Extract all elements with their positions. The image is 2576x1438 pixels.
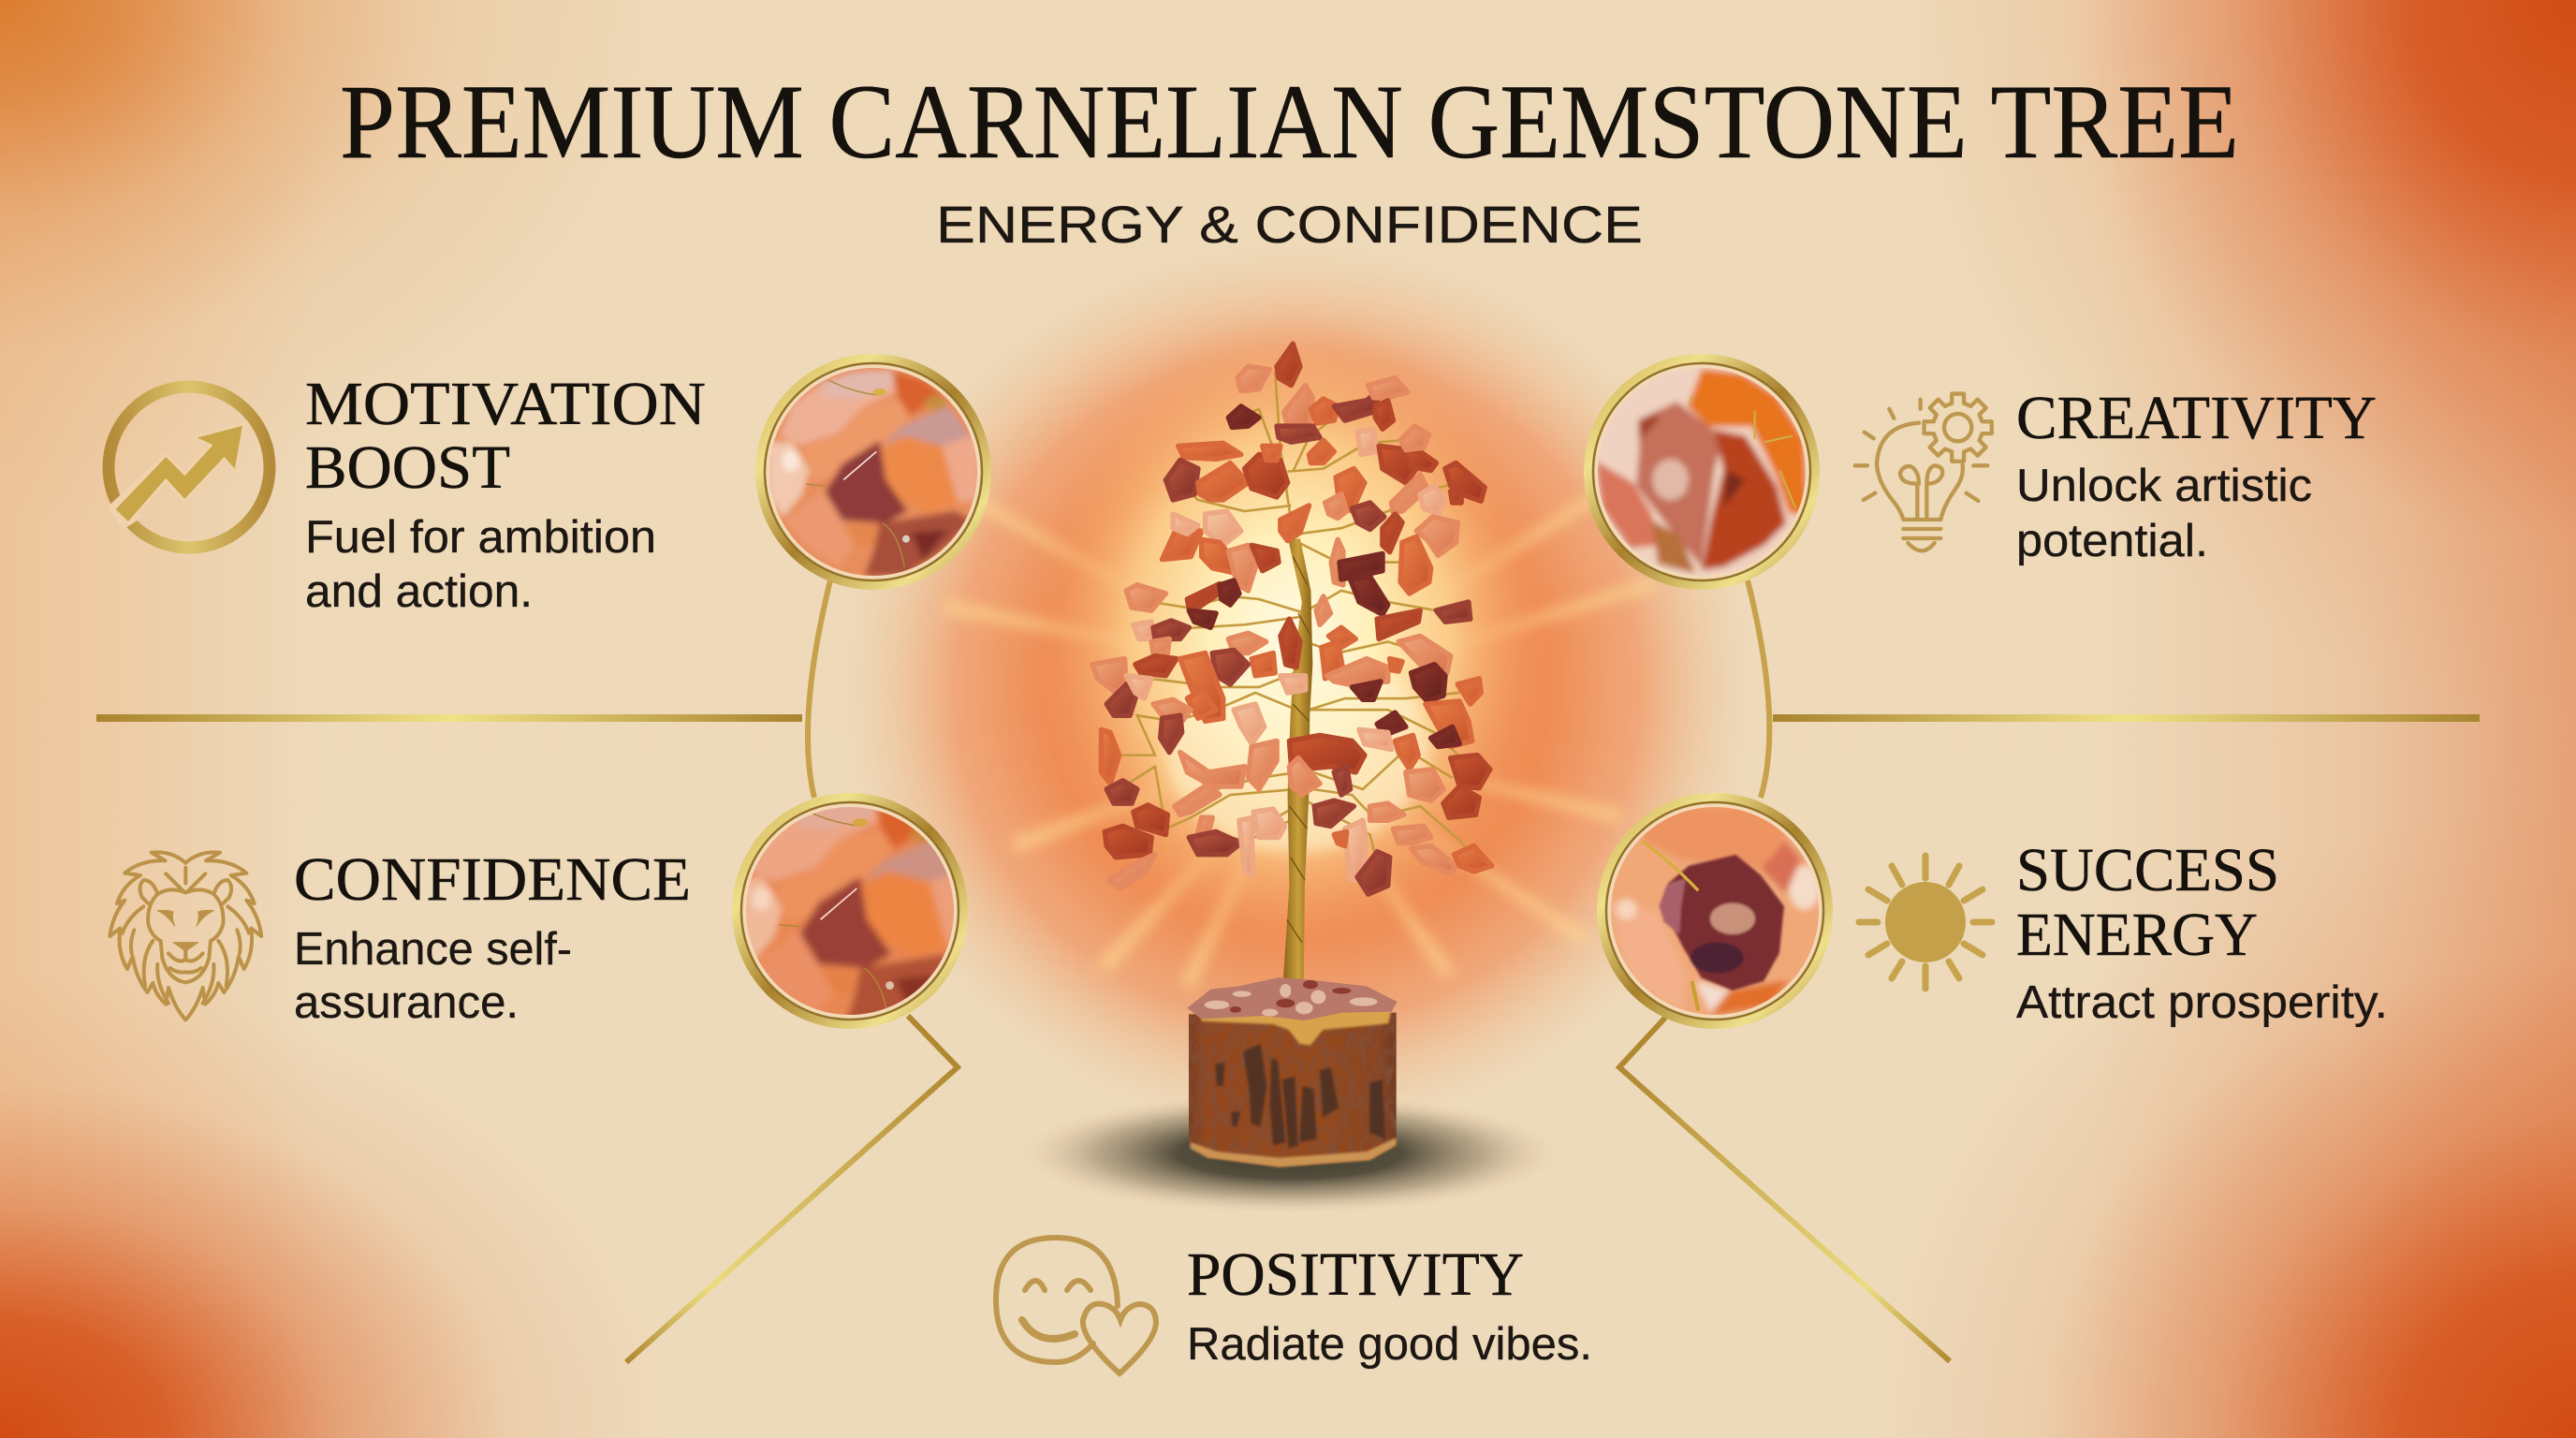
success energy block: ENERGY [2016,901,2258,969]
description: Fuel for ambition [305,512,656,563]
lower left angled line [626,1016,958,1362]
carnelian chips [1092,344,1492,894]
gemstone tree [1092,344,1492,979]
description: Unlock artistic [2016,461,2312,511]
bark marks [1215,1044,1385,1149]
lower right angled line [1619,1018,1950,1361]
gemstone photo: confidence [732,793,968,1029]
icon: light bulb with gear [1855,394,1992,550]
creativity block: potential. [2016,516,2208,566]
connector lines [96,580,2480,1362]
positivity block [996,1238,1592,1373]
heading: SUCCESS [2016,836,2279,904]
right divider line [1773,714,2480,722]
heading: POSITIVITY [1187,1240,1524,1309]
confidence block [110,845,691,1028]
shadow under tree [1023,1093,1557,1213]
gemstone photo: creativity [1584,354,1820,590]
wood base with gravel [1187,977,1398,1167]
description: Attract prosperity. [2016,977,2388,1028]
light rim top [1201,1009,1392,1046]
icon: smiley with heart [996,1238,1156,1373]
left arc [808,580,830,798]
description: Radiate good vibes. [1187,1319,1592,1370]
heading: CREATIVITY [2016,384,2377,452]
motivation boost block: BOOST [305,433,510,502]
right arc [1748,580,1769,798]
success energy block [1859,836,2388,1028]
heading: MOTIVATION [305,370,706,438]
description: Enhance self- [294,924,572,975]
gemstone photo: motivation [755,354,991,590]
trunk [1283,538,1312,979]
confidence block: assurance. [294,977,519,1028]
motivation boost block [109,370,706,617]
central orange glow with rays [839,239,1756,1137]
motivation boost block: and action. [305,566,533,617]
branches [1108,373,1474,863]
light rim bottom [1191,1137,1397,1167]
icon: lion [110,852,261,1020]
icon: rising arrow in circle [109,387,270,548]
creativity block [1855,384,2377,566]
gemstone photo: success [1597,793,1833,1029]
icon: sun [1859,856,1992,989]
subtitle: ENERGY & CONFIDENCE [936,195,1643,254]
heading: CONFIDENCE [294,845,691,914]
base body [1189,1013,1397,1167]
gravel top [1187,977,1398,1020]
title: PREMIUM CARNELIAN GEMSTONE TREE [340,64,2239,181]
left divider line [96,714,802,722]
